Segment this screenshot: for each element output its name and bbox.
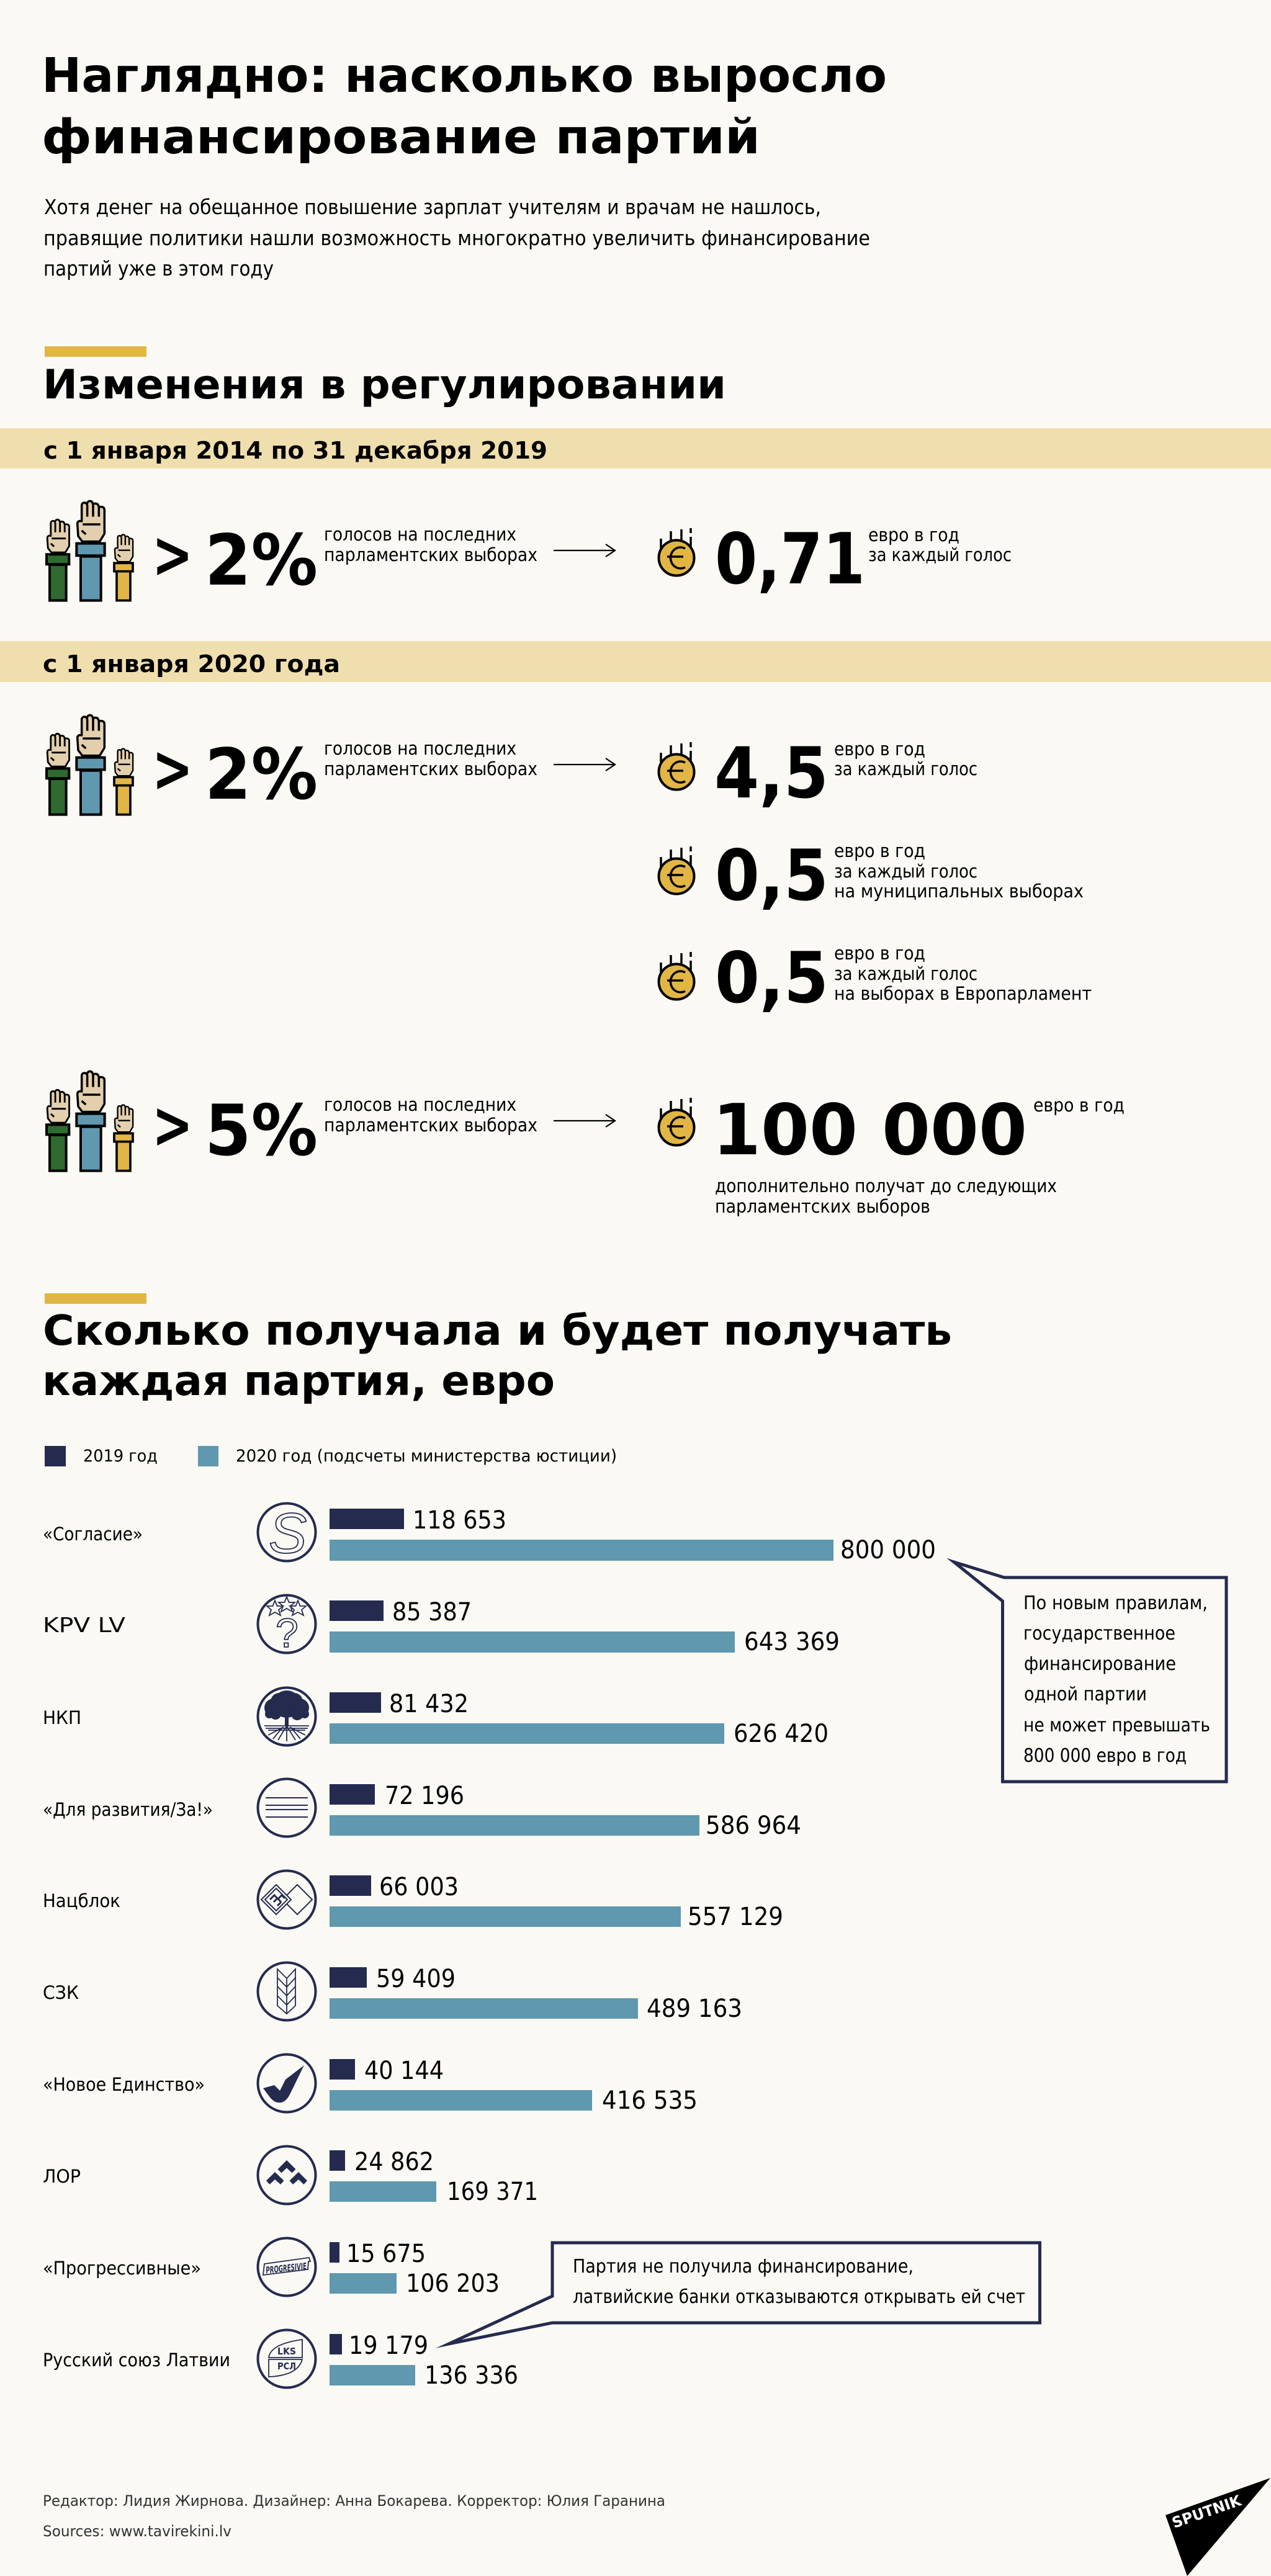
amount caption: за каждый голос (834, 758, 977, 779)
row: Soglasie (43, 1502, 936, 1565)
row: over 2 percent from 2020 (47, 715, 1092, 1019)
row: Latvian Russian Union: 19 179 (349, 2331, 428, 2360)
votes caption: голосов на последних (324, 524, 516, 545)
amount caption (868, 524, 1012, 565)
row: National Alliance: 66 003 (379, 1873, 459, 1901)
amount caption: за каждый голос (868, 544, 1012, 565)
section heading (42, 1306, 952, 1405)
amount caption: евро в год (1033, 1095, 1125, 1116)
votes caption (324, 738, 537, 779)
callout: 800 000 cap: 800 000 евро в год (1023, 1745, 1187, 1767)
municipal caption: за каждый голос (834, 861, 977, 882)
row: KPV LV: 85 387 (392, 1598, 472, 1627)
threshold 2 percent: > (152, 517, 193, 593)
icon: two diamonds (258, 1870, 315, 1929)
extra caption: дополнительно получат до следующих (715, 1175, 1057, 1196)
icon: S logo: S (269, 1502, 307, 1565)
row: Progressives: 106 203 (406, 2269, 500, 2298)
row: Soglasie: 118 653 (413, 1506, 506, 1535)
row: For Development (43, 1779, 801, 1840)
European Parliament caption: евро в год (834, 943, 925, 964)
row: Soglasie: «Согласие» (43, 1524, 143, 1545)
icon: euro coin (659, 528, 694, 576)
threshold 5 percent (152, 1087, 318, 1172)
intro text: правящие политики нашли возможность многократно увеличить финансирование (43, 226, 870, 250)
icon: LKS logo: LKS (277, 2346, 296, 2357)
European Parliament caption: за каждый голос (834, 963, 977, 984)
icon: euro coin (659, 742, 694, 789)
row: KPV LV (43, 1595, 840, 1656)
title (42, 48, 887, 165)
title: финансирование партий (42, 110, 760, 165)
icon: wheat ear (258, 1962, 315, 2021)
row: New Unity (43, 2054, 698, 2115)
icon: euro coin (659, 952, 694, 999)
icon: tree with roots (258, 1688, 315, 1745)
row: For Development: 586 964 (706, 1811, 801, 1840)
callout: 800 000 cap (954, 1562, 1226, 1782)
logo: Sputnik: SPUTNIK (1170, 2492, 1244, 2532)
amount 4.5: 4,5 (714, 732, 829, 814)
row: LOR: 169 371 (447, 2178, 538, 2206)
European Parliament caption (834, 943, 1092, 1004)
row: Soglasie: 800 000 (840, 1536, 936, 1564)
callout: 800 000 cap: одной партии (1024, 1684, 1147, 1705)
votes caption: голосов на последних (324, 1094, 516, 1115)
row: For Development: 72 196 (385, 1782, 464, 1810)
icon: S logo (258, 1502, 315, 1565)
European Parliament caption: на выборах в Европарламент (834, 983, 1092, 1004)
section accent bar (45, 346, 146, 357)
row: Latvian Russian Union (43, 2330, 518, 2390)
votes caption (324, 1094, 537, 1136)
votes caption: парламентских выборах (324, 544, 537, 565)
callout: 800 000 cap: По новым правилам, (1023, 1592, 1208, 1614)
row: NKP: НКП (43, 1707, 81, 1728)
intro text: партий уже в этом году (43, 256, 274, 280)
icon: raised hands (47, 501, 133, 601)
period band 2014-2019: с 1 января 2014 по 31 декабря 2019 (43, 437, 547, 464)
votes caption: парламентских выборах (324, 758, 537, 779)
row: NKP: 81 432 (389, 1690, 469, 1718)
row: over 5 percent (47, 1071, 1125, 1217)
logo: Sputnik (1165, 2478, 1270, 2576)
row: LOR: ЛОР (43, 2166, 81, 2187)
row: National Alliance: Нацблок (43, 1890, 120, 1911)
icon: euro coin (659, 1098, 694, 1146)
row: NKP: 626 420 (734, 1720, 829, 1748)
intro text (43, 195, 870, 280)
threshold 5 percent: 5% (205, 1090, 318, 1172)
icon: Progresivie logo: PROGRESIVIE (265, 2261, 307, 2276)
icon: horizontal lines (258, 1779, 315, 1837)
period band from 2020 (0, 641, 1271, 682)
amount caption: евро в год (868, 524, 959, 545)
callout: no funding: латвийские банки отказываются открывать ей счет (573, 2286, 1025, 2308)
callout: 800 000 cap: государственное (1023, 1623, 1175, 1645)
row: National Alliance: 557 129 (688, 1903, 783, 1931)
row: ZZS: 489 163 (647, 1995, 742, 2023)
municipal caption (834, 840, 1084, 902)
row: ZZS: 59 409 (376, 1965, 456, 1993)
amount 100 000: 100 000 (712, 1089, 1027, 1171)
arrow (554, 544, 615, 557)
extra caption (715, 1175, 1057, 1217)
row: For Development: «Для развития/За!» (43, 1799, 213, 1820)
section heading: Изменения в регулировании (43, 362, 726, 408)
period band from 2020: с 1 января 2020 года (43, 650, 340, 678)
credits: Sources: www.tavirekini.lv (43, 2523, 231, 2540)
row: New Unity: 416 535 (602, 2086, 698, 2115)
row: ZZS (43, 1962, 742, 2023)
municipal caption: на муниципальных выборах (834, 881, 1084, 902)
icon: Progresivie logo (258, 2238, 315, 2296)
arrow (554, 1115, 615, 1127)
row: National Alliance (43, 1870, 783, 1931)
callout: 800 000 cap: не может превышать (1023, 1715, 1210, 1736)
row: Latvian Russian Union: Русский союз Латвии (43, 2349, 230, 2371)
panel: funding per party (42, 1293, 1226, 2390)
legend (45, 1446, 617, 1466)
votes caption: парламентских выборах (324, 1115, 537, 1136)
arrow (554, 758, 615, 771)
title: Наглядно: насколько выросло (42, 48, 887, 104)
threshold 2 percent: > (152, 731, 193, 807)
row: NKP (43, 1688, 829, 1748)
row: Progressives (43, 2238, 500, 2298)
credits: Редактор: Лидия Жирнова. Дизайнер: Анна Бокарева. Корректор: Юлия Гаранина (43, 2492, 665, 2510)
period band 2014-2019 (0, 428, 1271, 469)
legend: 2019 год (83, 1447, 158, 1466)
votes caption: голосов на последних (324, 738, 516, 759)
amount 0.71: 0,71 (715, 518, 865, 600)
row: Progressives: 15 675 (346, 2240, 426, 2268)
icon: euro coin (659, 846, 694, 894)
icon: stars and question mark (258, 1595, 315, 1656)
row: Progressives: «Прогрессивные» (43, 2258, 201, 2279)
legend: 2020 год (подсчеты министерства юстиции) (236, 1447, 617, 1466)
threshold 5 percent: > (152, 1087, 193, 1163)
threshold 2 percent: 2% (205, 734, 318, 815)
row: KPV LV: 643 369 (744, 1628, 840, 1656)
icon: check mark (258, 2054, 315, 2112)
row: LOR: 24 862 (354, 2148, 434, 2176)
row: LOR (43, 2146, 538, 2206)
icon: LKS logo (258, 2330, 315, 2388)
amount caption (834, 738, 977, 779)
callout: no funding (449, 2243, 1040, 2344)
section heading: каждая партия, евро (42, 1357, 555, 1405)
threshold 2 percent: 2% (205, 519, 318, 601)
panel: regulation changes (0, 346, 1271, 1217)
icon: raised hands (47, 1071, 133, 1171)
amount 0.5 European Parliament: 0,5 (715, 937, 829, 1019)
municipal caption: евро в год (834, 840, 925, 861)
extra caption: парламентских выборов (715, 1196, 930, 1217)
callout: 800 000 cap: финансирование (1024, 1653, 1176, 1675)
icon: LKS logo: РСЛ (277, 2361, 296, 2372)
votes caption (324, 524, 537, 565)
callout: no funding: Партия не получила финансирование, (573, 2256, 914, 2278)
icon: stars and question mark: ? (276, 1610, 299, 1656)
section accent bar (45, 1293, 146, 1304)
row: KPV LV: KPV LV (43, 1613, 125, 1637)
threshold 2 percent (152, 517, 318, 601)
threshold 2 percent (152, 731, 318, 815)
row: over 2 percent, 0.71 euro (47, 501, 1012, 601)
amount 0.5 municipal: 0,5 (715, 835, 829, 917)
intro text: Хотя денег на обещанное повышение зарплат учителям и врачам не нашлось, (44, 195, 821, 219)
icon: raised hands (47, 715, 133, 815)
row: ZZS: СЗК (43, 1982, 79, 2003)
row: New Unity: 40 144 (364, 2057, 444, 2085)
amount caption: евро в год (834, 738, 925, 760)
row: Latvian Russian Union: 136 336 (424, 2361, 518, 2390)
section heading: Сколько получала и будет получать (43, 1306, 952, 1355)
credits (43, 2492, 665, 2540)
row: New Unity: «Новое Единство» (43, 2074, 205, 2095)
icon: three chevrons (258, 2146, 315, 2204)
